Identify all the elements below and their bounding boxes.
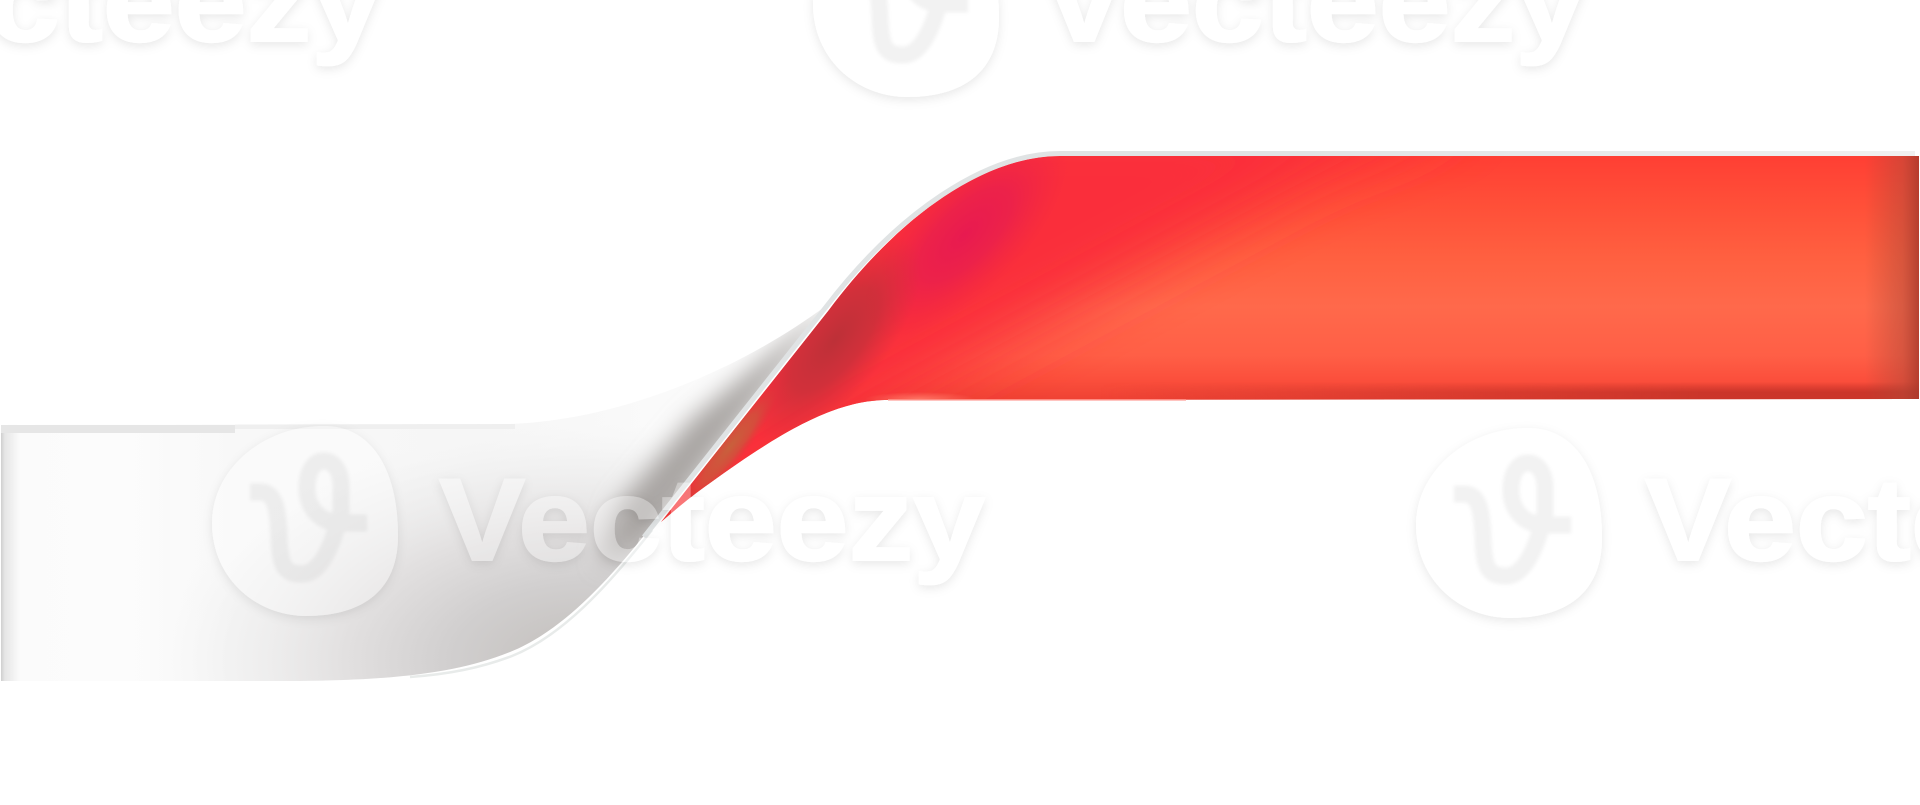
ribbon edge highlight — [644, 154, 1915, 537]
watermark: bottom row text left: Vecteezy — [439, 454, 985, 585]
watermark: bottom row logo left — [212, 426, 398, 616]
red ribbon section — [661, 156, 1919, 522]
watermark: top row logo — [813, 0, 999, 97]
white ribbon section — [1, 310, 820, 681]
watermark: bottom row logo right — [1416, 428, 1602, 618]
